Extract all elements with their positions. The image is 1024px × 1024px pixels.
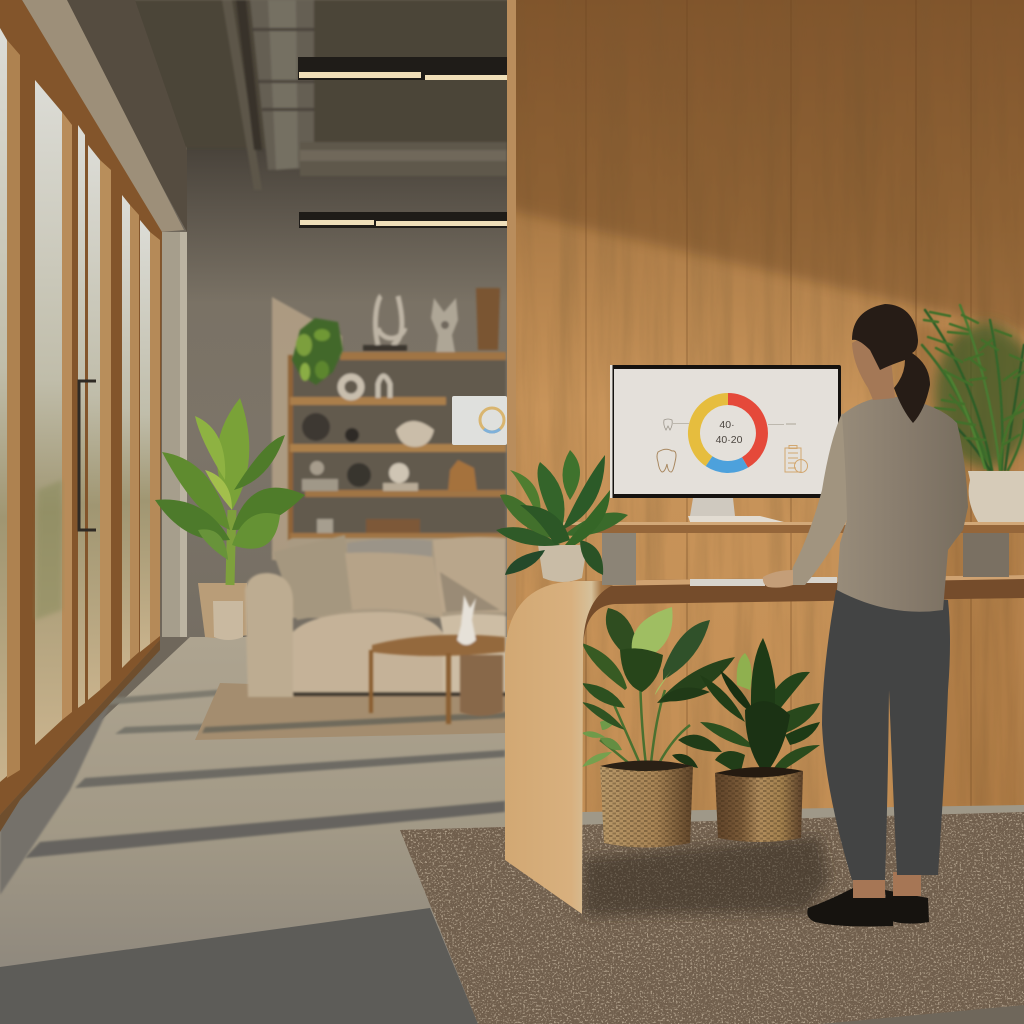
ceiling light bars [298,57,507,228]
donut centre numbers [716,419,743,446]
keyboard [690,577,837,586]
large floor plant [155,398,305,640]
right pot plant [922,305,1024,522]
icon: clipboard with coin [785,446,808,472]
wicker baskets [600,760,803,848]
floor shadow stripes [0,688,505,1024]
upper desk shelf [527,522,1024,533]
hand [763,570,793,588]
icon: small tooth [664,419,672,430]
small plant on shelf [292,318,343,385]
ceiling with ducts [130,0,510,190]
icon: large tooth [657,449,676,472]
back wall [187,145,507,640]
left soffit and column [22,0,187,637]
foreground textured rug [400,812,1024,1024]
wood wall panel [500,0,1024,815]
donut centre numbers: 40·20 [716,434,743,446]
sofa [245,535,506,697]
coffee table and rabbit figurine [369,595,505,724]
person [763,304,968,926]
torso sweater [837,397,968,612]
monitor [610,365,841,498]
left arm [787,413,863,585]
connector left [673,423,689,424]
connector right [768,423,796,425]
small display on shelf [452,396,507,445]
baseboard [582,805,1024,826]
monitor stand [688,498,784,522]
window wall with glass panels [0,0,162,832]
neck and face [852,335,895,400]
underdesk plant left [582,607,735,773]
curved desk [505,575,1024,914]
ankle skin [853,872,921,898]
donut centre numbers: 40· [719,419,735,431]
door handle [79,381,96,530]
legs [822,590,950,880]
hair and ponytail [852,304,930,423]
underdesk plant right [700,638,820,775]
background shelf unit [288,288,506,540]
pot [968,471,1024,522]
background rug [195,683,506,740]
desk plant [496,450,628,582]
desk riser blocks [602,532,1009,585]
donut chart [694,399,762,467]
floor [0,637,510,1024]
shoes [807,888,929,926]
